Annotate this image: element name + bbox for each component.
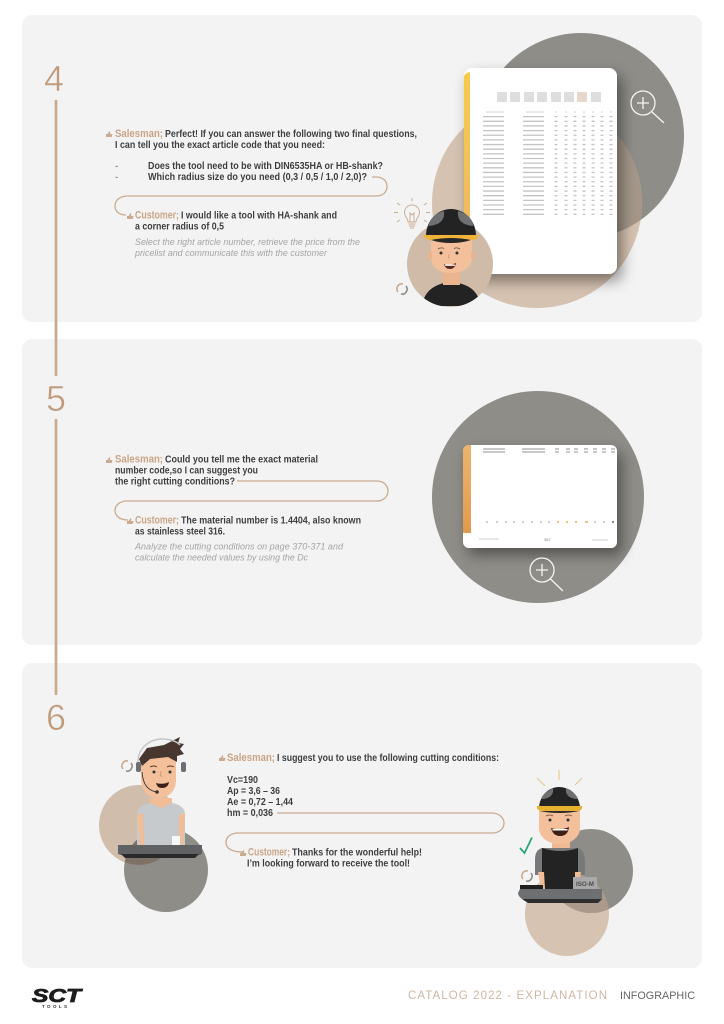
icon: phone swirl [397,284,407,294]
footer: logo: SCT [32,986,84,1006]
footer: logo [32,986,84,1009]
dialogue: step 4: Select the right article number, retrieve the price from the [135,237,360,248]
sign: ISO-M [573,877,597,889]
dialogue: step 4: a corner radius of 0,5 [135,222,224,232]
panel: step 4 [22,15,702,322]
step number 5: 5 [46,378,66,419]
dialogue: step 5: Salesman; [115,454,163,466]
icon: check mark [520,838,532,853]
icon: thumb [127,518,134,524]
dialogue: step 4: I can tell you the exact article code that you need: [115,140,325,151]
dialogue: step 4 [106,128,417,259]
dialogue: step 5: Customer; [135,514,179,526]
illustration: catalog page in circle [432,391,644,603]
dialogue: step 6 [219,752,504,870]
dialogue: step 6: Customer; [248,846,290,858]
dialogue: step 6: hm = 0,036 [227,808,273,819]
dialogue: step 6: Thanks for the wonderful help! [292,848,422,858]
step number 6: 6 [46,697,66,738]
dialogue: step 6: Ae = 0,72 – 1,44 [227,797,293,808]
dialogue: step 4: Salesman; [115,128,163,140]
character: salesman with headset [99,737,208,912]
icon: thumb [127,213,134,219]
connector line [115,481,388,520]
icon: shine rays [537,770,582,786]
icon: thumb [219,755,226,761]
catalog footer card [463,445,617,548]
icon: magnifier [530,558,563,591]
timeline connector lines [55,100,57,695]
step number 4: 4 [44,58,64,99]
dialogue: step 6: Ap = 3,6 – 36 [227,786,280,797]
dialogue: step 4: Does the tool need to be with DIN6535HA or HB-shank? [148,161,383,172]
catalog footer card: 367 [544,537,551,542]
dialogue: step 6: Salesman; [227,752,275,764]
icon: light bulb [394,198,430,228]
illustration: catalog page with circles [432,33,684,308]
dialogue: step 4: Which radius size do you need (0,3 / 0,5 / 1,0 / 2,0)? [148,172,367,183]
connector line [115,177,387,215]
character: customer with helmet [407,209,493,307]
dialogue: step 4: pricelist and communicate this with the customer [134,248,328,259]
sign: ISO-M: ISO-M [576,881,594,888]
icon: thumb [106,131,112,137]
connector line [226,813,504,852]
dialogue: step 5: Could you tell me the exact material [165,454,318,466]
panel: step 5 [22,339,702,645]
footer: catalog caption: CATALOG 2022 - EXPLANATION [408,990,607,1002]
icon: thumb [240,850,246,856]
dialogue: step 6: I’m looking forward to receive the tool! [247,858,410,870]
dialogue: step 4: Customer; [135,210,179,222]
dialogue: step 5: as stainless steel 316. [135,526,225,538]
dialogue: step 5 [106,454,388,564]
character: customer at desk [518,770,633,956]
dialogue: step 5: The material number is 1.4404, also known [181,516,361,526]
footer: infographic label: INFOGRAPHIC [620,990,695,1002]
dialogue: step 6: I suggest you to use the following cutting conditions: [277,753,499,764]
dialogue: step 5: the right cutting conditions? [115,476,235,488]
icon: magnifier [631,91,664,123]
catalog table card [464,68,617,274]
dialogue: step 5: calculate the needed values by using the Dc [135,552,308,564]
dialogue: step 4: - [115,161,118,172]
icon: phone swirl [122,761,132,771]
icon: phone swirl [522,871,532,881]
dialogue: step 4: Perfect! If you can answer the following two final questions, [165,129,417,140]
icon: thumb [106,457,112,463]
footer: logo: TOOLS [42,1004,67,1009]
panel: step 6 [22,663,702,968]
dialogue: step 6: Vc=190 [227,775,258,786]
dialogue: step 5: Analyze the cutting conditions on page 370-371 and [134,542,344,552]
dialogue: step 5: number code,so I can suggest you [115,466,258,476]
dialogue: step 4: I would like a tool with HA-shank and [181,210,337,222]
dialogue: step 4: - [115,172,118,183]
